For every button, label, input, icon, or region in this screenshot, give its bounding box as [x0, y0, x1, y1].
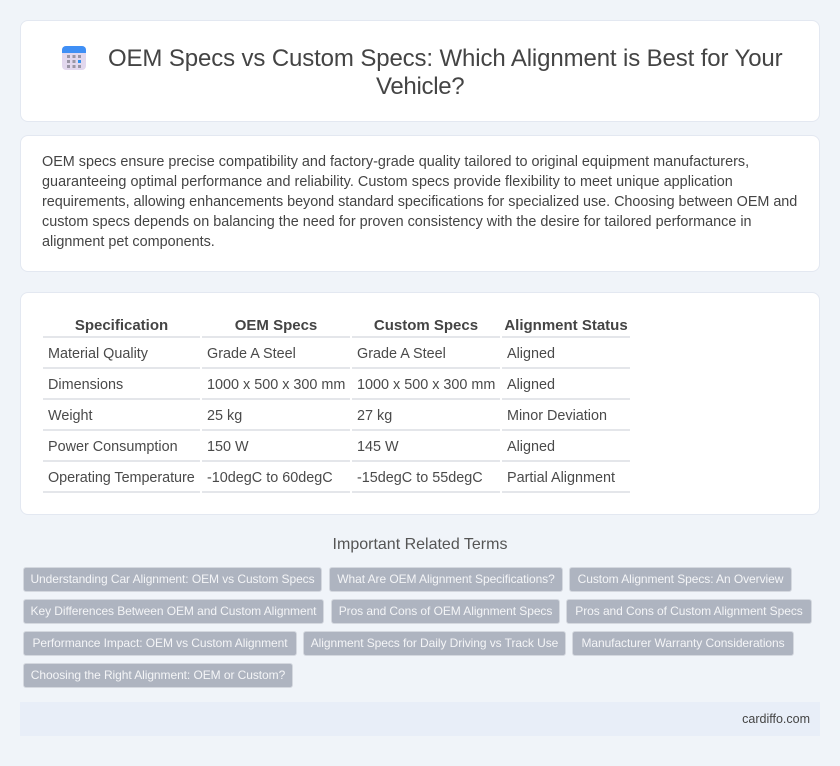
- related term chips: What Are OEM Alignment Specifications?: [337, 572, 555, 586]
- intro paragraph: guaranteeing optimal performance and reliability. Custom specs provide flexibility to meet unique application: [42, 174, 733, 190]
- panel: comparison table: [20, 292, 820, 515]
- comparison table: Minor Deviation: [507, 408, 607, 424]
- related term chips: Pros and Cons of OEM Alignment Specs: [339, 604, 552, 618]
- comparison table: Operating Temperature: [48, 470, 195, 486]
- comparison table: OEM Specs: [235, 317, 317, 334]
- icon: calendar: [62, 46, 86, 70]
- intro paragraph: OEM specs ensure precise compatibility and factory-grade quality tailored to original equipment manufacturers,: [42, 154, 749, 170]
- comparison table: Grade A Steel: [357, 346, 446, 362]
- footer credit: cardiffo.com: [742, 712, 810, 726]
- title: Vehicle?: [376, 73, 464, 100]
- related term chips: Manufacturer Warranty Considerations: [581, 636, 785, 650]
- title: [108, 45, 783, 100]
- comparison table: -10degC to 60degC: [207, 470, 333, 486]
- related term chips: Key Differences Between OEM and Custom Alignment: [31, 604, 316, 618]
- related term chips: Custom Alignment Specs: An Overview: [578, 572, 783, 586]
- comparison table: Aligned: [507, 377, 555, 393]
- related term chips: Pros and Cons of Custom Alignment Specs: [575, 604, 803, 618]
- comparison table: Dimensions: [48, 377, 123, 393]
- related term chips: Choosing the Right Alignment: OEM or Custom?: [31, 668, 285, 682]
- comparison table: Partial Alignment: [507, 470, 615, 486]
- comparison table: Aligned: [507, 346, 555, 362]
- comparison table: Weight: [48, 408, 93, 424]
- comparison table: 145 W: [357, 439, 399, 455]
- comparison table: 1000 x 500 x 300 mm: [207, 377, 345, 393]
- title: OEM Specs vs Custom Specs: Which Alignment is Best for Your: [108, 45, 783, 72]
- comparison table: Custom Specs: [374, 317, 478, 334]
- comparison table: [43, 317, 630, 493]
- comparison table: 150 W: [207, 439, 249, 455]
- comparison table: -15degC to 55degC: [357, 470, 483, 486]
- comparison table: Grade A Steel: [207, 346, 296, 362]
- panel: intro text: [20, 135, 820, 272]
- footer: [20, 702, 820, 736]
- related term chips: [23, 567, 812, 688]
- intro paragraph: [42, 154, 797, 250]
- comparison table: 27 kg: [357, 408, 392, 424]
- related term chips: Understanding Car Alignment: OEM vs Custom Specs: [30, 572, 315, 586]
- panel: title card: [20, 20, 820, 122]
- comparison table: Material Quality: [48, 346, 148, 362]
- heading: related terms: Important Related Terms: [333, 536, 507, 553]
- comparison table: Alignment Status: [504, 317, 628, 334]
- comparison table: Aligned: [507, 439, 555, 455]
- related term chips: Performance Impact: OEM vs Custom Alignment: [32, 636, 288, 650]
- intro paragraph: requirements, allowing enhancements beyond standard specifications for specialized use. Choosing between OEM and: [42, 194, 797, 210]
- comparison table: 25 kg: [207, 408, 242, 424]
- comparison table: 1000 x 500 x 300 mm: [357, 377, 495, 393]
- comparison table: Specification: [75, 317, 168, 334]
- intro paragraph: custom specs depends on balancing the need for proven consistency with the desire for tailored performance in: [42, 214, 752, 230]
- comparison table: Power Consumption: [48, 439, 178, 455]
- related term chips: Alignment Specs for Daily Driving vs Track Use: [311, 636, 558, 650]
- intro paragraph: alignment pet components.: [42, 234, 215, 250]
